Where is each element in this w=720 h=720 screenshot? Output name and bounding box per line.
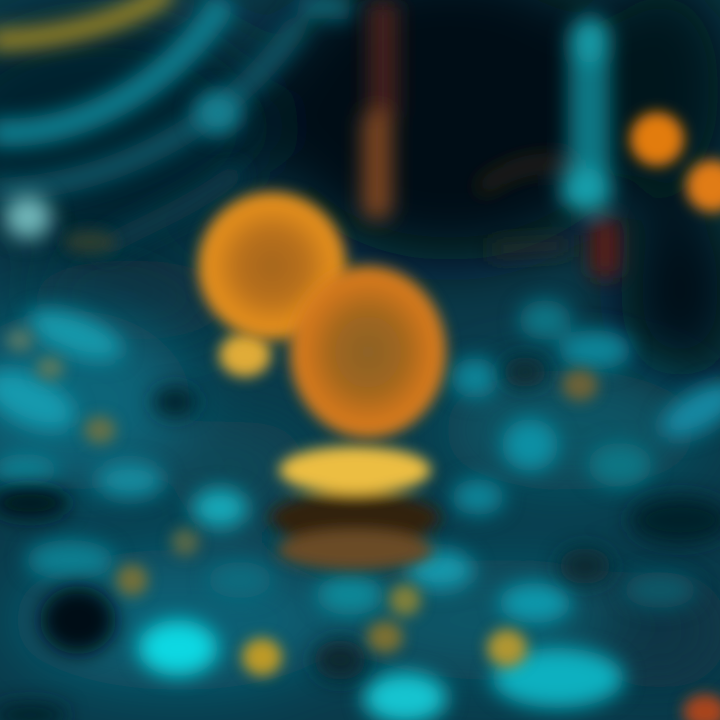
coin: upper left xyxy=(198,192,346,340)
coin stack base xyxy=(219,333,440,570)
arcs upper left xyxy=(0,0,350,250)
teal glow fields xyxy=(0,310,720,690)
shadow under stack xyxy=(270,492,440,544)
dark upper area xyxy=(0,0,720,380)
dark patches xyxy=(0,357,720,720)
orange dots upper right xyxy=(630,112,720,212)
small gold flecks xyxy=(6,230,720,720)
coin: lower right xyxy=(290,266,446,438)
vertical bars upper right and centre xyxy=(362,0,620,278)
